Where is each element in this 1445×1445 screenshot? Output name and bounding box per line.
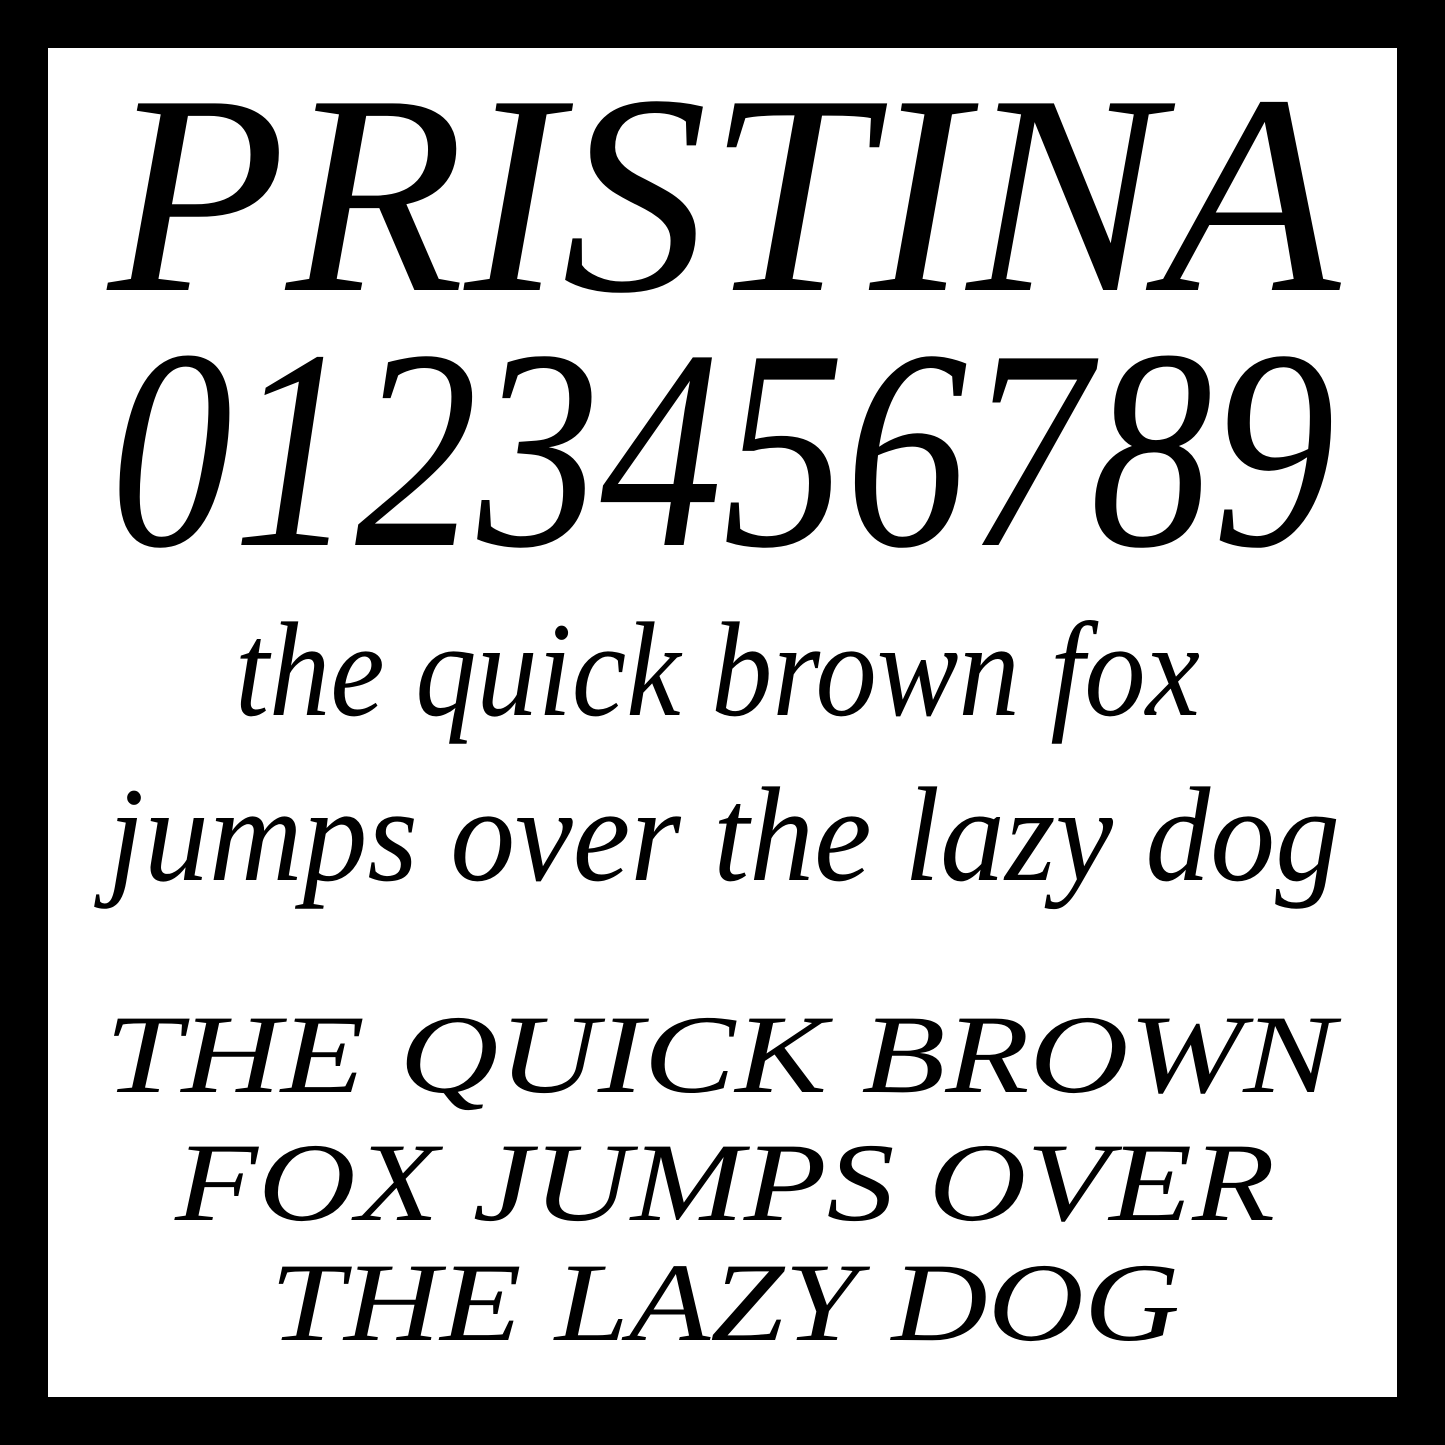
lowercase line 1: the quick brown fox <box>235 596 1200 745</box>
uppercase line 1: THE QUICK BROWN <box>105 993 1342 1117</box>
uppercase line 3: THE LAZY DOG <box>270 1241 1180 1365</box>
uppercase line 2: FOX JUMPS OVER <box>174 1121 1275 1245</box>
lowercase line 2: jumps over the lazy dog <box>94 761 1340 910</box>
title: PRISTINA: PRISTINA <box>103 36 1344 352</box>
